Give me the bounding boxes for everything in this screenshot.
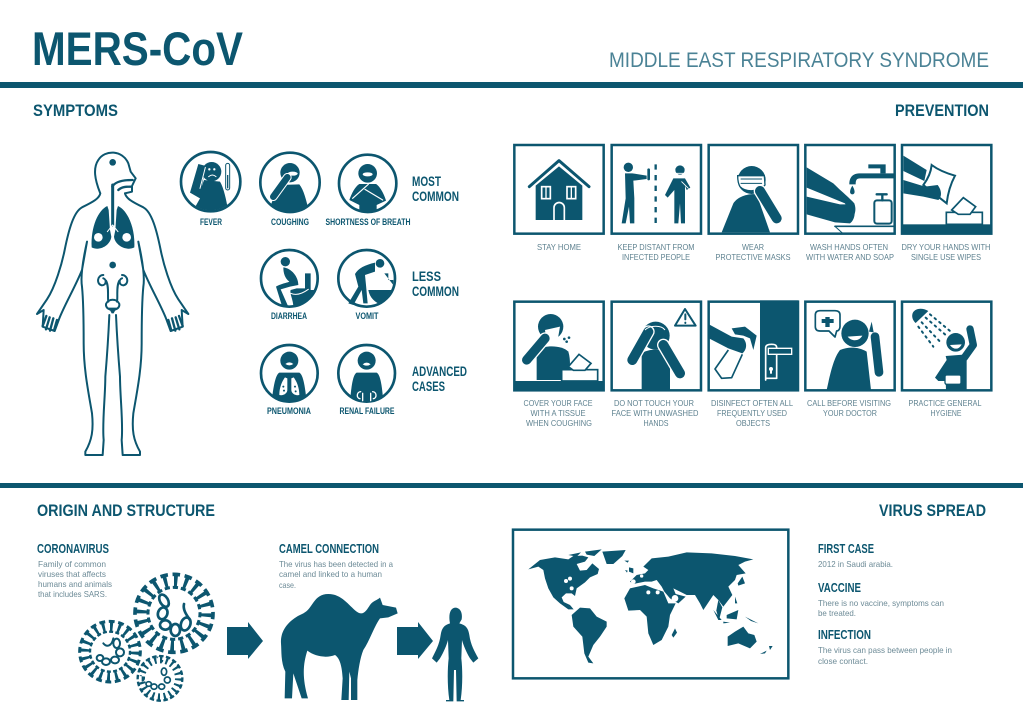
text: camel connection xyxy=(279,542,393,590)
subtitle: MIDDLE EAST RESPIRATORY SYNDROME xyxy=(609,49,989,72)
caption: keep distant: INFECTED PEOPLE xyxy=(622,252,690,262)
panel: cover face xyxy=(514,302,604,390)
caption: wash hands: WASH HANDS OFTEN xyxy=(810,242,888,252)
caption: cover face xyxy=(524,398,593,428)
caption: stay home: STAY HOME xyxy=(537,242,581,252)
text: coronavirus: CORONAVIRUS xyxy=(37,542,109,556)
text: camel connection: camel and linked to a human xyxy=(279,569,382,579)
panel: general hygiene xyxy=(902,302,991,390)
text: camel connection: The virus has been detected in a xyxy=(279,559,393,569)
heading: origin and structure: ORIGIN AND STRUCTURE xyxy=(37,501,215,520)
title: MERS-CoV xyxy=(32,22,244,75)
caption: do not touch face: FACE WITH UNWASHED xyxy=(612,408,698,418)
panel: stay home xyxy=(514,145,604,234)
panel: dry hands xyxy=(902,145,991,234)
caption: wear masks: WEAR xyxy=(742,242,764,252)
panel: world map xyxy=(513,530,788,678)
text: first case xyxy=(818,542,893,569)
text: advanced cases xyxy=(412,364,467,394)
illustration: human silhouette xyxy=(432,608,478,701)
label: fever: FEVER xyxy=(200,217,222,227)
text: advanced cases: ADVANCED xyxy=(412,364,467,379)
caption: dry hands: DRY YOUR HANDS WITH xyxy=(902,242,990,252)
caption: general hygiene: HYGIENE xyxy=(930,408,962,418)
arrow: camel to human xyxy=(397,622,433,659)
icon: shortness of breath xyxy=(339,155,396,213)
text: most common xyxy=(412,174,459,204)
heading: prevention: PREVENTION xyxy=(895,101,989,120)
human body diagram xyxy=(37,153,188,455)
caption: wear masks: PROTECTIVE MASKS xyxy=(716,252,791,262)
caption: call doctor: YOUR DOCTOR xyxy=(823,408,877,418)
caption: do not touch face: HANDS xyxy=(644,418,669,428)
heading: symptoms: SYMPTOMS xyxy=(33,101,118,120)
icon: pneumonia xyxy=(261,345,318,402)
text: advanced cases: CASES xyxy=(412,379,445,394)
text: first case: 2012 in Saudi arabia. xyxy=(818,559,893,569)
text: most common: COMMON xyxy=(412,189,459,204)
text: infection: INFECTION xyxy=(818,628,871,642)
label: renal failure: RENAL FAILURE xyxy=(340,406,394,416)
heading: virus spread: VIRUS SPREAD xyxy=(879,501,986,520)
text: coronavirus: humans and animals xyxy=(38,579,112,589)
label: shortness of breath: SHORTNESS OF BREATH xyxy=(326,217,410,227)
text: infection xyxy=(818,628,952,666)
caption: wash hands: WITH WATER AND SOAP xyxy=(806,252,894,262)
caption: call doctor: CALL BEFORE VISITING xyxy=(807,398,891,408)
caption: keep distant xyxy=(618,242,694,262)
caption: dry hands xyxy=(902,242,990,262)
text: less common xyxy=(412,269,459,299)
panel: wash hands xyxy=(805,145,895,234)
text: first case: FIRST CASE xyxy=(818,542,874,556)
label: pneumonia: PNEUMONIA xyxy=(267,406,311,416)
text: coronavirus: viruses that affects xyxy=(38,569,106,579)
label: vomit: VOMIT xyxy=(356,311,379,321)
text: camel connection: CAMEL CONNECTION xyxy=(279,542,379,556)
icon: coughing xyxy=(260,153,320,213)
text: vaccine xyxy=(818,581,944,618)
text: vaccine: be treated. xyxy=(818,608,856,618)
caption: general hygiene xyxy=(908,398,982,418)
caption: wash hands xyxy=(806,242,894,262)
caption: disinfect objects: DISINFECT OFTEN ALL xyxy=(711,398,793,408)
caption: cover face: WHEN COUGHING xyxy=(526,418,592,428)
icon: renal failure xyxy=(338,345,395,402)
text: camel connection: case. xyxy=(279,580,296,590)
label: coughing: COUGHING xyxy=(271,217,309,227)
text: most common: MOST xyxy=(412,174,442,189)
panel: disinfect objects xyxy=(709,300,798,390)
caption: disinfect objects: FREQUENTLY USED xyxy=(717,408,787,418)
panel: keep distant xyxy=(612,145,701,234)
arrow: virus to camel xyxy=(227,622,263,659)
caption: dry hands: SINGLE USE WIPES xyxy=(911,252,981,262)
caption: keep distant: KEEP DISTANT FROM xyxy=(618,242,694,252)
caption: disinfect objects xyxy=(711,398,793,428)
caption: cover face: COVER YOUR FACE xyxy=(524,398,593,408)
text: vaccine: VACCINE xyxy=(818,581,861,595)
illustration: camel xyxy=(281,594,398,700)
icon: diarrhea xyxy=(261,250,318,307)
text: less common: COMMON xyxy=(412,284,459,299)
text: coronavirus: Family of common xyxy=(38,559,106,569)
panel: do not touch face xyxy=(612,302,701,390)
text: infection: close contact. xyxy=(818,656,868,666)
illustration: coronaviruses xyxy=(80,574,213,701)
label: diarrhea: DIARRHEA xyxy=(271,311,307,321)
caption: do not touch face: DO NOT TOUCH YOUR xyxy=(614,398,694,408)
caption: wear masks xyxy=(716,242,791,262)
caption: disinfect objects: OBJECTS xyxy=(736,418,770,428)
caption: call doctor xyxy=(807,398,891,418)
text: less common: LESS xyxy=(412,269,441,284)
panel: wear masks xyxy=(709,145,798,234)
caption: general hygiene: PRACTICE GENERAL xyxy=(908,398,982,408)
text: infection: The virus can pass between people in xyxy=(818,645,952,655)
icon: vomit xyxy=(338,250,397,307)
caption: do not touch face xyxy=(612,398,698,428)
text: coronavirus: that includes SARS. xyxy=(38,589,107,599)
caption: cover face: WITH A TISSUE xyxy=(530,408,586,418)
text: vaccine: There is no vaccine, symptoms can xyxy=(818,598,944,608)
text: coronavirus xyxy=(37,542,112,599)
icon: fever xyxy=(181,152,240,213)
panel: call doctor xyxy=(805,302,895,390)
